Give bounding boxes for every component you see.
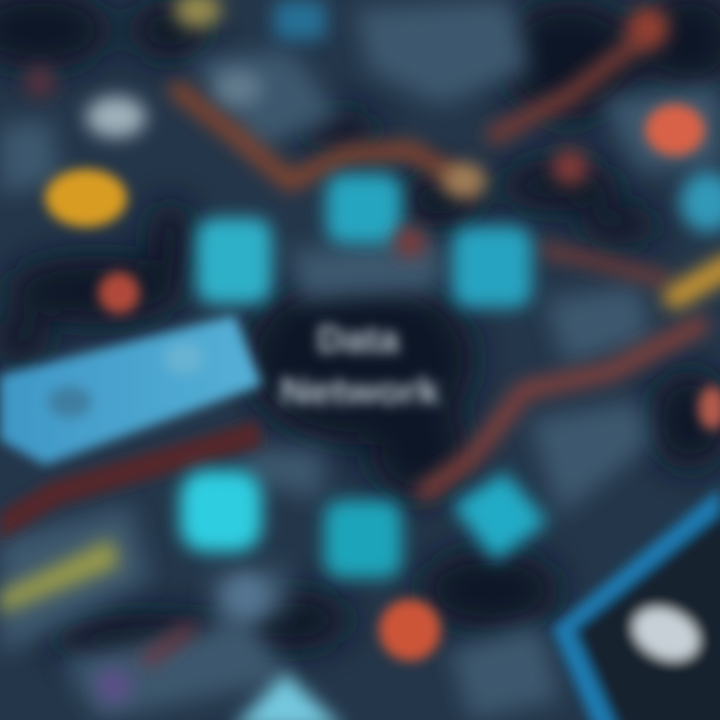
node: lower right xyxy=(452,472,548,562)
arrow: yellow connector xyxy=(675,265,720,297)
panel: dark red card edge xyxy=(0,420,262,540)
icon: yellow dot top xyxy=(174,0,222,28)
arrow: brown connector upper left xyxy=(178,90,470,185)
icon: purple dot xyxy=(96,668,132,704)
node group: teal squares xyxy=(180,174,548,578)
panel: large blue card xyxy=(0,315,262,465)
title: central blurred text, wording is a placeholder: Data xyxy=(317,319,400,361)
node: upper right xyxy=(452,226,532,308)
node: lower left xyxy=(180,470,262,552)
title: central blurred text, wording is a placeholder xyxy=(280,319,441,413)
icon: blue tile top xyxy=(274,0,326,40)
panel: yellow-green bar xyxy=(0,538,120,614)
icon: red dot top left xyxy=(24,66,56,98)
node: lower centre xyxy=(324,500,402,578)
icon: tan dot xyxy=(442,163,486,197)
icon: red dot top right xyxy=(627,7,669,49)
icon: red dot far right xyxy=(698,386,720,430)
node: upper left xyxy=(196,218,272,304)
arrow: brown connector right xyxy=(545,250,665,280)
icon: white oval in card xyxy=(625,598,707,670)
panel: light blue shape bottom xyxy=(232,672,345,720)
icon: grey dot top xyxy=(214,70,262,106)
title: central blurred text, wording is a placeholder: Network xyxy=(280,371,441,413)
icon: red dot left xyxy=(98,272,140,314)
icon: red dash xyxy=(148,630,188,660)
icon: white oval xyxy=(86,96,146,138)
icon: card dot left xyxy=(48,386,92,418)
icon: cyan tile right xyxy=(680,172,720,232)
arrow: brown connector lower right xyxy=(425,325,700,492)
icon: card dot right xyxy=(164,342,204,374)
icon: yellow oval xyxy=(45,169,127,227)
node: top centre xyxy=(326,174,402,244)
icon: red dot centre xyxy=(394,226,426,258)
arrow: brown connector top right xyxy=(495,40,640,135)
icon: orange badge right xyxy=(645,104,705,156)
panel: blue framed card bottom right xyxy=(552,488,720,720)
icon: red dot mid right xyxy=(552,149,588,185)
icon: red circle lower xyxy=(379,599,441,661)
icon: grey dot lower xyxy=(224,574,268,618)
